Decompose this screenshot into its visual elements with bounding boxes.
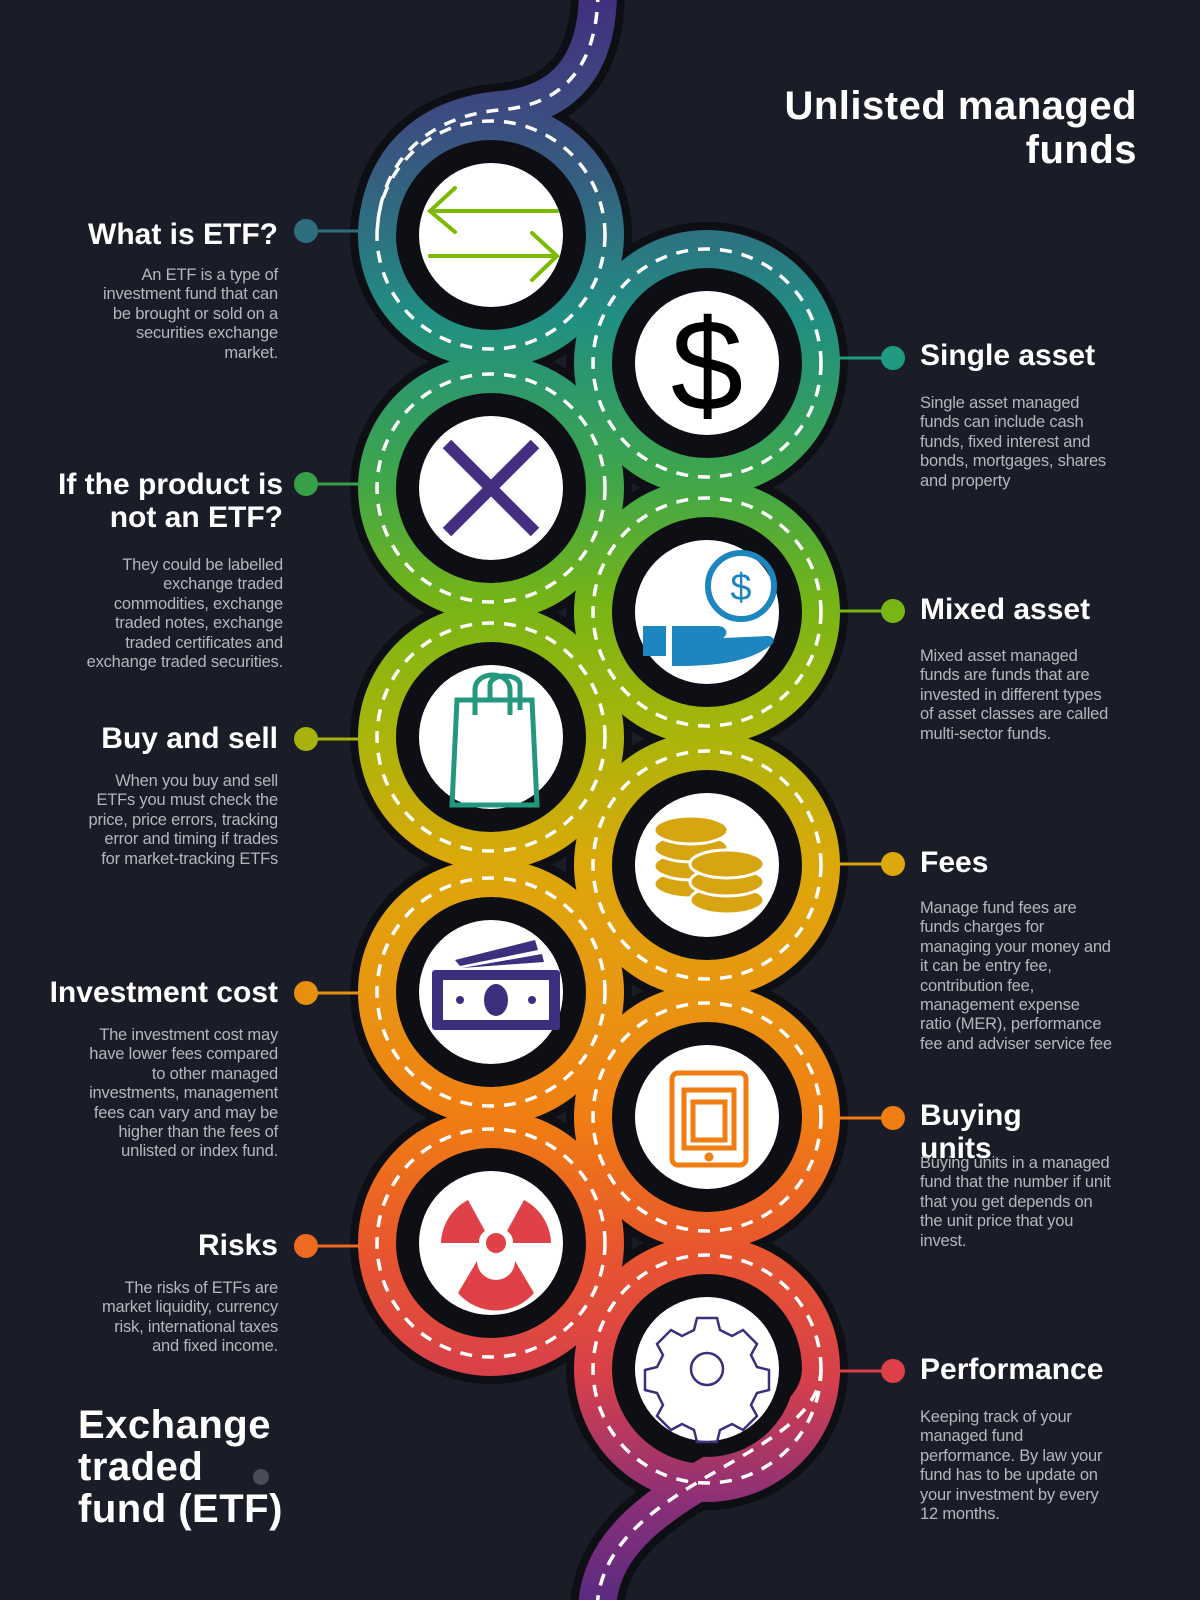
block: single asset: funds can include cash — [920, 413, 1083, 431]
block: risks: and fixed income. — [152, 1337, 278, 1355]
block: what is ETF: be brought or sold on a — [113, 305, 278, 323]
block: buying units — [920, 1099, 1111, 1250]
block: fees: ratio (MER), performance — [920, 1015, 1101, 1033]
block: performance: 12 months. — [920, 1505, 1000, 1523]
block: buying units: the unit price that you — [920, 1212, 1073, 1230]
block: investment cost: unlisted or index fund. — [121, 1142, 278, 1160]
block: not ETF: They could be labelled — [122, 556, 283, 574]
block: investment cost: investments, management — [89, 1084, 278, 1102]
block: buy and sell — [88, 722, 278, 868]
title: unlisted managed funds: Unlisted managed — [784, 84, 1137, 128]
block: fees: management expense — [920, 996, 1080, 1014]
block: not ETF: traded notes, exchange — [115, 614, 283, 632]
block: investment cost — [50, 976, 278, 1160]
title: unlisted managed funds: funds — [1026, 128, 1137, 172]
icon: hand with coin — [643, 553, 774, 666]
block: buy and sell: price, price errors, tracking — [88, 811, 278, 829]
title: ETF: Exchange — [78, 1403, 271, 1447]
block: what is ETF — [88, 218, 278, 362]
block: investment cost: Investment cost — [50, 976, 278, 1009]
block: not ETF: exchange traded — [163, 575, 283, 593]
block: not ETF: commodities, exchange — [114, 595, 283, 613]
block: mixed asset — [920, 593, 1108, 743]
block: buying units: fund that the number if unit — [920, 1173, 1111, 1191]
block: not ETF: exchange traded securities. — [87, 653, 283, 671]
block: single asset: Single asset — [920, 339, 1095, 372]
block: what is ETF: What is ETF? — [88, 218, 278, 251]
block: investment cost: higher than the fees of — [118, 1123, 278, 1141]
icon: coins — [654, 816, 764, 914]
icon: arrows — [430, 188, 557, 280]
block: fees — [920, 846, 1112, 1053]
block: risks — [102, 1229, 278, 1355]
block: mixed asset: of asset classes are called — [920, 705, 1108, 723]
block: performance: Keeping track of your — [920, 1408, 1072, 1426]
block: buying units: invest. — [920, 1232, 966, 1250]
block: buy and sell: for market-tracking ETFs — [101, 850, 278, 868]
block: buying units: Buying — [920, 1099, 1022, 1132]
block: single asset: bonds, mortgages, shares — [920, 452, 1106, 470]
block: mixed asset: invested in different types — [920, 686, 1101, 704]
block: buying units: units — [920, 1132, 992, 1165]
block: single asset: and property — [920, 472, 1010, 490]
block: performance: managed fund — [920, 1427, 1023, 1445]
icon: cross — [447, 444, 535, 532]
block: performance: fund has to be update on — [920, 1466, 1098, 1484]
block: fees: managing your money and — [920, 938, 1111, 956]
block: mixed asset: multi-sector funds. — [920, 725, 1051, 743]
block: single asset — [920, 339, 1106, 490]
block: fees: fee and adviser service fee — [920, 1035, 1112, 1053]
block: buying units: Buying units in a managed — [920, 1154, 1109, 1172]
block: fees: funds charges for — [920, 918, 1044, 936]
block: single asset: funds, fixed interest and — [920, 433, 1090, 451]
block: mixed asset: funds are funds that are — [920, 666, 1089, 684]
block: risks: market liquidity, currency — [102, 1298, 278, 1316]
connectors — [294, 219, 905, 1383]
title: ETF: traded — [78, 1445, 203, 1489]
block: not ETF — [58, 468, 283, 671]
block: investment cost: fees can vary and may be — [94, 1104, 278, 1122]
block: mixed asset: Mixed asset managed — [920, 647, 1078, 665]
block: risks: The risks of ETFs are — [124, 1279, 278, 1297]
block: fees: Fees — [920, 846, 988, 879]
block: what is ETF: An ETF is a type of — [141, 266, 278, 284]
icon: hand with coin: $ — [730, 567, 752, 609]
block: buy and sell: Buy and sell — [101, 722, 278, 755]
block: buy and sell: ETFs you must check the — [96, 791, 278, 809]
block: fees: it can be entry fee, — [920, 957, 1052, 975]
block: buying units: that you get depends on — [920, 1193, 1092, 1211]
block: buy and sell: error and timing if trades — [104, 830, 278, 848]
block: fees: Manage fund fees are — [920, 899, 1077, 917]
block: fees: contribution fee, — [920, 977, 1034, 995]
block: what is ETF: investment fund that can — [103, 285, 278, 303]
icon: radiation — [441, 1200, 551, 1311]
block: not ETF: not an ETF? — [110, 501, 283, 534]
block: performance — [920, 1353, 1103, 1523]
block: not ETF: If the product is — [58, 468, 283, 501]
icon: gear — [645, 1318, 769, 1442]
block: performance: your investment by every — [920, 1486, 1099, 1504]
block: performance: performance. By law your — [920, 1447, 1102, 1465]
block: risks: Risks — [198, 1229, 278, 1262]
title: ETF — [78, 1403, 283, 1531]
icon: tablet — [672, 1073, 746, 1165]
icon: bag — [452, 675, 537, 805]
block: investment cost: The investment cost may — [99, 1026, 278, 1044]
block: performance: Performance — [920, 1353, 1103, 1386]
block: not ETF: traded certificates and — [125, 634, 283, 652]
block: investment cost: to other managed — [152, 1065, 278, 1083]
block: single asset: Single asset managed — [920, 394, 1079, 412]
block: investment cost: have lower fees compared — [89, 1045, 278, 1063]
title: unlisted managed funds — [784, 84, 1137, 172]
block: what is ETF: securities exchange — [136, 324, 278, 342]
title: ETF: fund (ETF) — [78, 1487, 283, 1531]
block: what is ETF: market. — [224, 344, 278, 362]
block: risks: risk, international taxes — [114, 1318, 278, 1336]
block: buy and sell: When you buy and sell — [115, 772, 278, 790]
block: mixed asset: Mixed asset — [920, 593, 1090, 626]
icon: dollar: $ — [671, 292, 743, 438]
icon: banknote — [432, 940, 560, 1030]
